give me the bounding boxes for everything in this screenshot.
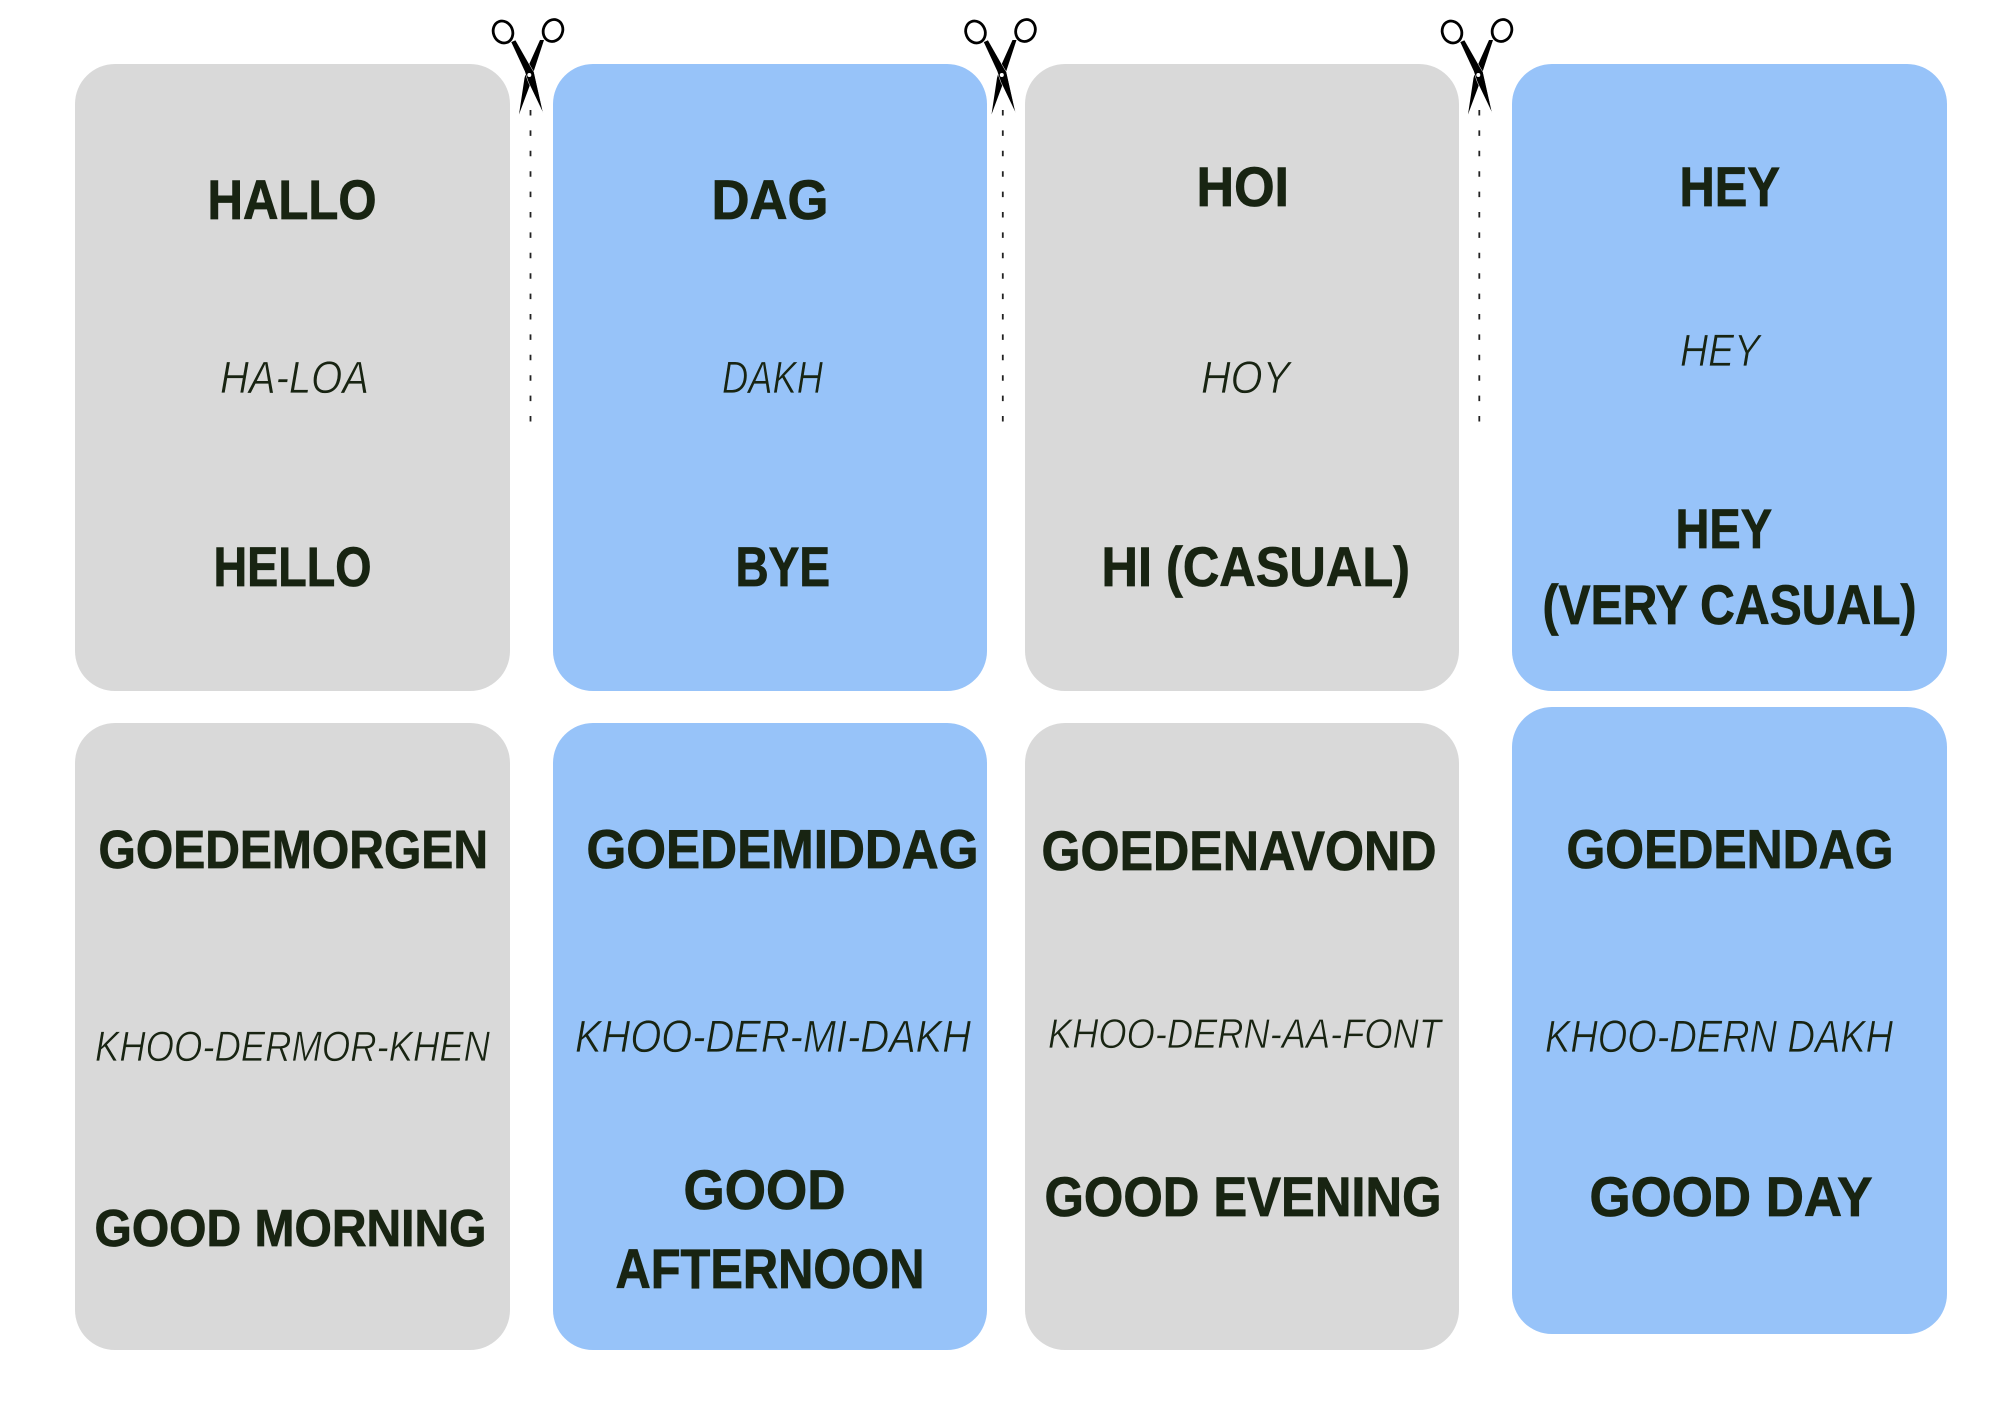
cut line 2 [1002,110,1004,422]
cut line 1 [530,110,532,422]
pronunciation: HA-LOA: HA-LOA [220,352,369,403]
translation: GOOD EVENING: GOOD EVENING [1044,1165,1442,1228]
heading: GOEDENAVOND: GOEDENAVOND [1042,819,1436,882]
card: goedemorgen [75,723,510,1350]
icon: scissors 2 [962,17,1039,114]
heading: GOEDENDAG: GOEDENDAG [1566,818,1894,880]
pronunciation: KHOO-DERMOR-KHEN: KHOO-DERMOR-KHEN [95,1023,491,1071]
card: goedendag [1512,707,1947,1334]
translation: GOOD DAY: GOOD DAY [1590,1165,1872,1228]
translation: GOOD AFTERNOON: GOOD [684,1158,846,1221]
pronunciation: KHOO-DERN DAKH: KHOO-DERN DAKH [1545,1011,1893,1062]
translation: GOOD AFTERNOON [616,1158,924,1300]
translation: BYE: BYE [736,535,830,598]
heading: HEY: HEY [1680,155,1780,218]
card: hoi [1025,64,1459,691]
translation: HEY (VERY CASUAL): (VERY CASUAL) [1542,573,1916,636]
pronunciation: HEY: HEY [1680,325,1763,376]
pronunciation: KHOO-DERN-AA-FONT: KHOO-DERN-AA-FONT [1048,1010,1444,1057]
heading: HALLO: HALLO [208,168,376,231]
icon: scissors 1 [490,17,566,114]
icon: scissors 3 [1439,17,1515,114]
heading: DAG: DAG [712,168,828,231]
pronunciation: DAKH: DAKH [722,352,823,403]
translation: HI (CASUAL): HI (CASUAL) [1102,535,1410,598]
pronunciation: KHOO-DER-MI-DAKH: KHOO-DER-MI-DAKH [575,1011,971,1062]
translation: HELLO: HELLO [214,535,372,598]
card: goedemiddag [553,723,987,1350]
card: hey [1512,64,1947,691]
heading: HOI: HOI [1196,155,1289,218]
translation: HEY (VERY CASUAL) [1542,497,1916,636]
card: dag [553,64,987,691]
card: goedenavond [1025,723,1459,1350]
pronunciation: HOY: HOY [1201,352,1293,403]
heading: GOEDEMIDDAG: GOEDEMIDDAG [586,818,978,880]
translation: HEY (VERY CASUAL): HEY [1676,497,1772,560]
translation: GOOD MORNING: GOOD MORNING [94,1200,486,1258]
cut line 3 [1478,110,1480,422]
translation: GOOD AFTERNOON: AFTERNOON [616,1237,924,1300]
card: hallo [75,64,510,691]
heading: GOEDEMORGEN: GOEDEMORGEN [98,820,488,880]
